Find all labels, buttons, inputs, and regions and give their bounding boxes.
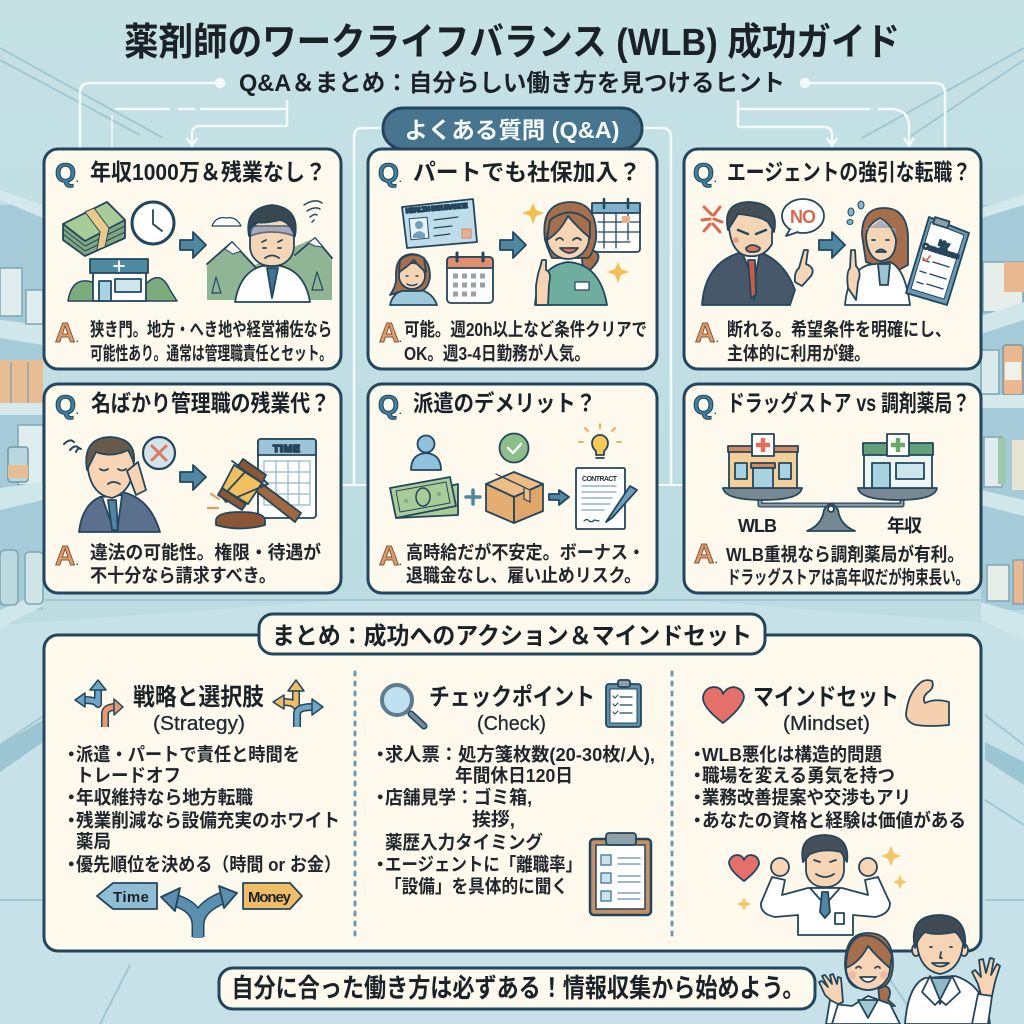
bullet list: check: 求人票：処方箋枚数(20-30枚/人), — [385, 744, 655, 765]
icon: arrow — [180, 232, 206, 258]
icon: sparkles — [522, 203, 629, 283]
answer 6 — [694, 538, 969, 588]
answer 2: 可能。週20h以上など条件クリアで — [404, 319, 647, 340]
bullet list: check: 店舗見学：ゴミ箱, — [385, 787, 532, 808]
icon: conditions clipboard — [906, 217, 969, 305]
icon: sweat drops — [847, 201, 864, 224]
question 4 — [55, 390, 330, 420]
icon: cardboard box — [486, 472, 543, 523]
heading: check: チェックポイント — [429, 684, 595, 711]
icon: balance scale with stores — [723, 434, 937, 531]
icon: worried pharmacist — [845, 208, 910, 305]
bullet list: mindset: ・ — [688, 744, 707, 765]
summary heading pill: まとめ：成功へのアクション＆マインドセット — [272, 623, 752, 650]
bullet list: mindset: 業務改善提案や交渉もアリ — [702, 787, 911, 808]
bullet list: strategy: 年収維持なら地方転職 — [76, 787, 253, 808]
heading: strategy: 戦略と選択肢 — [133, 684, 264, 711]
Q&A heading pill — [383, 108, 642, 149]
bullet list: strategy: 残業削減なら設備充実のホワイト — [76, 810, 340, 831]
question 3: . — [714, 174, 717, 184]
icon: orange branching arrows — [273, 680, 323, 727]
answer 3 — [695, 317, 951, 364]
icon: calendar — [447, 253, 493, 303]
answer 3: A — [695, 317, 715, 348]
bullet list: strategy: ・ — [62, 744, 81, 765]
bullet list: check: ・ — [371, 787, 390, 808]
bullet list: strategy: 薬局 — [76, 831, 111, 852]
bullet list: mindset: あなたの資格と経験は価値がある — [702, 810, 966, 831]
question 5: 派遣のデメリット？ — [413, 390, 596, 416]
answer 4: 不十分なら請求すべき。 — [90, 565, 276, 586]
answer 2 — [379, 317, 647, 364]
icon: anger mark — [702, 207, 722, 232]
question 4: Q — [55, 390, 76, 420]
answer 1: 可能性あり。通常は管理職責任とセット。 — [90, 343, 332, 364]
icon: heart — [703, 687, 744, 723]
icon: clock — [132, 202, 174, 244]
dividers — [355, 672, 672, 935]
question 6 — [693, 390, 970, 420]
bullet list: strategy: トレードオフ — [76, 765, 181, 786]
title: 薬剤師のワークライフバランス (WLB) 成功ガイド — [124, 22, 900, 64]
icon: magnifier — [382, 685, 424, 726]
bullet list: check: ・ — [371, 744, 390, 765]
icon: timesheet: TIME — [273, 443, 300, 455]
icon: mountains and tired doctor — [207, 201, 332, 302]
icon: gavel — [208, 459, 301, 528]
answer 1: 狭き門。地方・へき地や経営補佐なら — [90, 319, 332, 340]
tag: Money — [243, 883, 302, 909]
question 5: Q — [378, 390, 399, 420]
tag: Time — [97, 883, 157, 909]
bullet list: mindset: ・ — [688, 810, 707, 831]
column: strategy — [62, 680, 341, 938]
answer 5: 高時給だが不安定。ボーナス・ — [406, 542, 645, 563]
icon: stressed manager — [64, 437, 160, 532]
icon: arrow — [500, 232, 526, 258]
question 6: . — [714, 406, 717, 416]
icon: flexed arm — [906, 680, 949, 726]
answer 2: OK。週3-4日勤務が人気。 — [404, 343, 590, 364]
left shelves — [0, 205, 43, 610]
subheading: strategy: (Strategy) — [153, 713, 245, 735]
question 1: Q — [55, 158, 76, 188]
question 1: 年収1000万＆残業なし？ — [90, 159, 326, 185]
icon: conditions clipboard: My — [937, 238, 951, 250]
bullet list: strategy — [62, 744, 341, 875]
icon: calendar clipboard — [592, 199, 640, 252]
man pharmacist — [905, 915, 1000, 1024]
bullet list: mindset: WLB悪化は構造的問題 — [702, 744, 882, 765]
icon: arrow — [180, 465, 206, 490]
bullet list: strategy: ・ — [62, 810, 81, 831]
bullet list: check: 年間休日120日 — [455, 765, 573, 786]
tag: Time: Time — [113, 889, 149, 906]
icon: forked arrow — [161, 886, 237, 938]
icon: conditions clipboard: Conditions — [921, 241, 961, 261]
left hand — [819, 974, 843, 1005]
icon: contract and pen: CONTRACT — [582, 476, 618, 483]
answer 2: A — [379, 317, 399, 348]
bullet list: strategy: ・ — [62, 854, 81, 875]
summary heading pill — [259, 614, 765, 654]
subtitle: Q&A＆まとめ：自分らしい働き方を見つけるヒント — [239, 70, 785, 97]
column: check — [371, 680, 655, 915]
icon: small pharmacist — [390, 254, 437, 305]
question 2: パートでも社保加入？ — [413, 159, 641, 185]
icon: money stack — [63, 202, 125, 256]
right shelves — [981, 205, 1024, 610]
answer 4: . — [76, 557, 79, 567]
icon: NO speech bubble: NO — [790, 207, 816, 227]
icon: lightbulb — [579, 424, 621, 458]
question 5: . — [399, 406, 402, 416]
answer 6: . — [715, 555, 718, 565]
bullet list: mindset — [688, 744, 966, 831]
icon: cash stack — [390, 477, 458, 518]
answer 3: . — [716, 334, 719, 344]
answer 5: A — [379, 540, 399, 571]
icon: angry agent — [702, 202, 813, 305]
right hand — [972, 958, 1000, 996]
icon: arrow — [549, 490, 569, 505]
heading: mindset: マインドセット — [753, 684, 899, 711]
bullet list: strategy: 優先順位を決める（時間 or お金） — [76, 854, 341, 875]
panel: Q&A 6 drugstore vs pharmacy — [684, 384, 981, 593]
icon: small clipboard — [606, 680, 641, 727]
bullet list: strategy: ・ — [62, 787, 81, 808]
woman pharmacist — [819, 933, 900, 1024]
icon: waving pharmacists — [819, 915, 1000, 1024]
footer callout — [219, 968, 815, 1009]
icon: NO speech bubble — [782, 199, 824, 236]
bullet list: mindset: ・ — [688, 765, 707, 786]
panel: Q&A 5 dispatch — [368, 384, 657, 593]
question 2: . — [399, 174, 402, 184]
subheading: mindset: (Mindset) — [783, 713, 870, 735]
bullet list: mindset: ・ — [688, 787, 707, 808]
answer 6: A — [694, 538, 714, 569]
answer 1 — [55, 317, 332, 364]
icon: plus — [466, 490, 480, 504]
label: WLB: WLB — [738, 516, 777, 536]
icon: blue branching arrows — [75, 680, 123, 727]
icon: smiling nurse — [535, 202, 607, 305]
panel: Q&A 4 manager overtime — [44, 384, 341, 593]
bullet list: strategy: 派遣・パートで責任と時間を — [76, 744, 300, 765]
column: mindset — [688, 680, 966, 935]
panel: Q&A 3 agent — [684, 149, 981, 369]
bullet list: check: ・ — [371, 854, 390, 875]
answer 2: . — [399, 334, 402, 344]
icon: insurance card — [402, 199, 477, 248]
bullet list: mindset: 職場を変える勇気を持つ — [702, 765, 895, 786]
answer 4: 違法の可能性。権限・待遇が — [90, 542, 321, 563]
question 4: 名ばかり管理職の残業代？ — [91, 390, 330, 416]
question 6: Q — [693, 390, 714, 420]
panel: Q&A 1 income — [44, 149, 341, 369]
icon: pharmacy — [68, 259, 177, 301]
answer 5: . — [399, 557, 402, 567]
answer 3: 主体的に利用が鍵。 — [727, 343, 870, 364]
answer 4 — [55, 540, 321, 586]
answer 1: A — [55, 317, 75, 348]
bullet list: check: 「設備」を具体的に聞く — [385, 876, 568, 897]
question 5 — [378, 390, 596, 420]
icon: sparkles — [737, 846, 907, 911]
bullet list: check — [371, 744, 655, 897]
answer 6: WLB重視なら調剤薬局が有利。 — [726, 544, 964, 565]
question 2: Q — [378, 158, 399, 188]
icon: large clipboard — [590, 833, 651, 915]
icon: arrow — [819, 232, 845, 258]
question 1: . — [76, 174, 79, 184]
icon: person — [411, 436, 441, 470]
label: income: 年収 — [887, 515, 922, 536]
answer 1: . — [76, 334, 79, 344]
question 4: . — [76, 406, 79, 416]
icon: timesheet — [258, 439, 316, 518]
panel: summary — [44, 635, 981, 951]
icon: flexing pharmacist — [761, 835, 890, 935]
bullet list: check: 薬歴入力タイミング — [385, 832, 543, 853]
tag: Money: Money — [248, 889, 292, 906]
answer 5 — [379, 540, 645, 586]
answer 3: 断れる。希望条件を明確にし、 — [727, 319, 951, 340]
answer 4: A — [55, 540, 75, 571]
footer callout: 自分に合った働き方は必ずある！情報収集から始めよう。 — [232, 973, 804, 1003]
panel: Q&A 2 social insurance — [368, 149, 657, 369]
bullet list: check: 挨拶, — [472, 809, 515, 830]
question 3 — [693, 158, 971, 188]
icon: small heart — [729, 855, 759, 881]
Q&A heading pill: よくある質問 (Q&A) — [404, 117, 620, 143]
question 3: エージェントの強引な転職？ — [727, 159, 971, 185]
icon: contract and pen — [576, 468, 637, 529]
connector lines — [80, 79, 945, 485]
icon: check badge — [500, 434, 528, 462]
bullet list: check: エージェントに「離職率」 — [385, 854, 582, 875]
icon: cross circle — [143, 437, 175, 469]
icon: insurance card: HEALTH INSURANCE — [406, 203, 469, 215]
answer 5: 退職金なし、雇い止めリスク。 — [406, 565, 641, 586]
question 3: Q — [693, 158, 714, 188]
subheading: check: (Check) — [477, 713, 546, 735]
